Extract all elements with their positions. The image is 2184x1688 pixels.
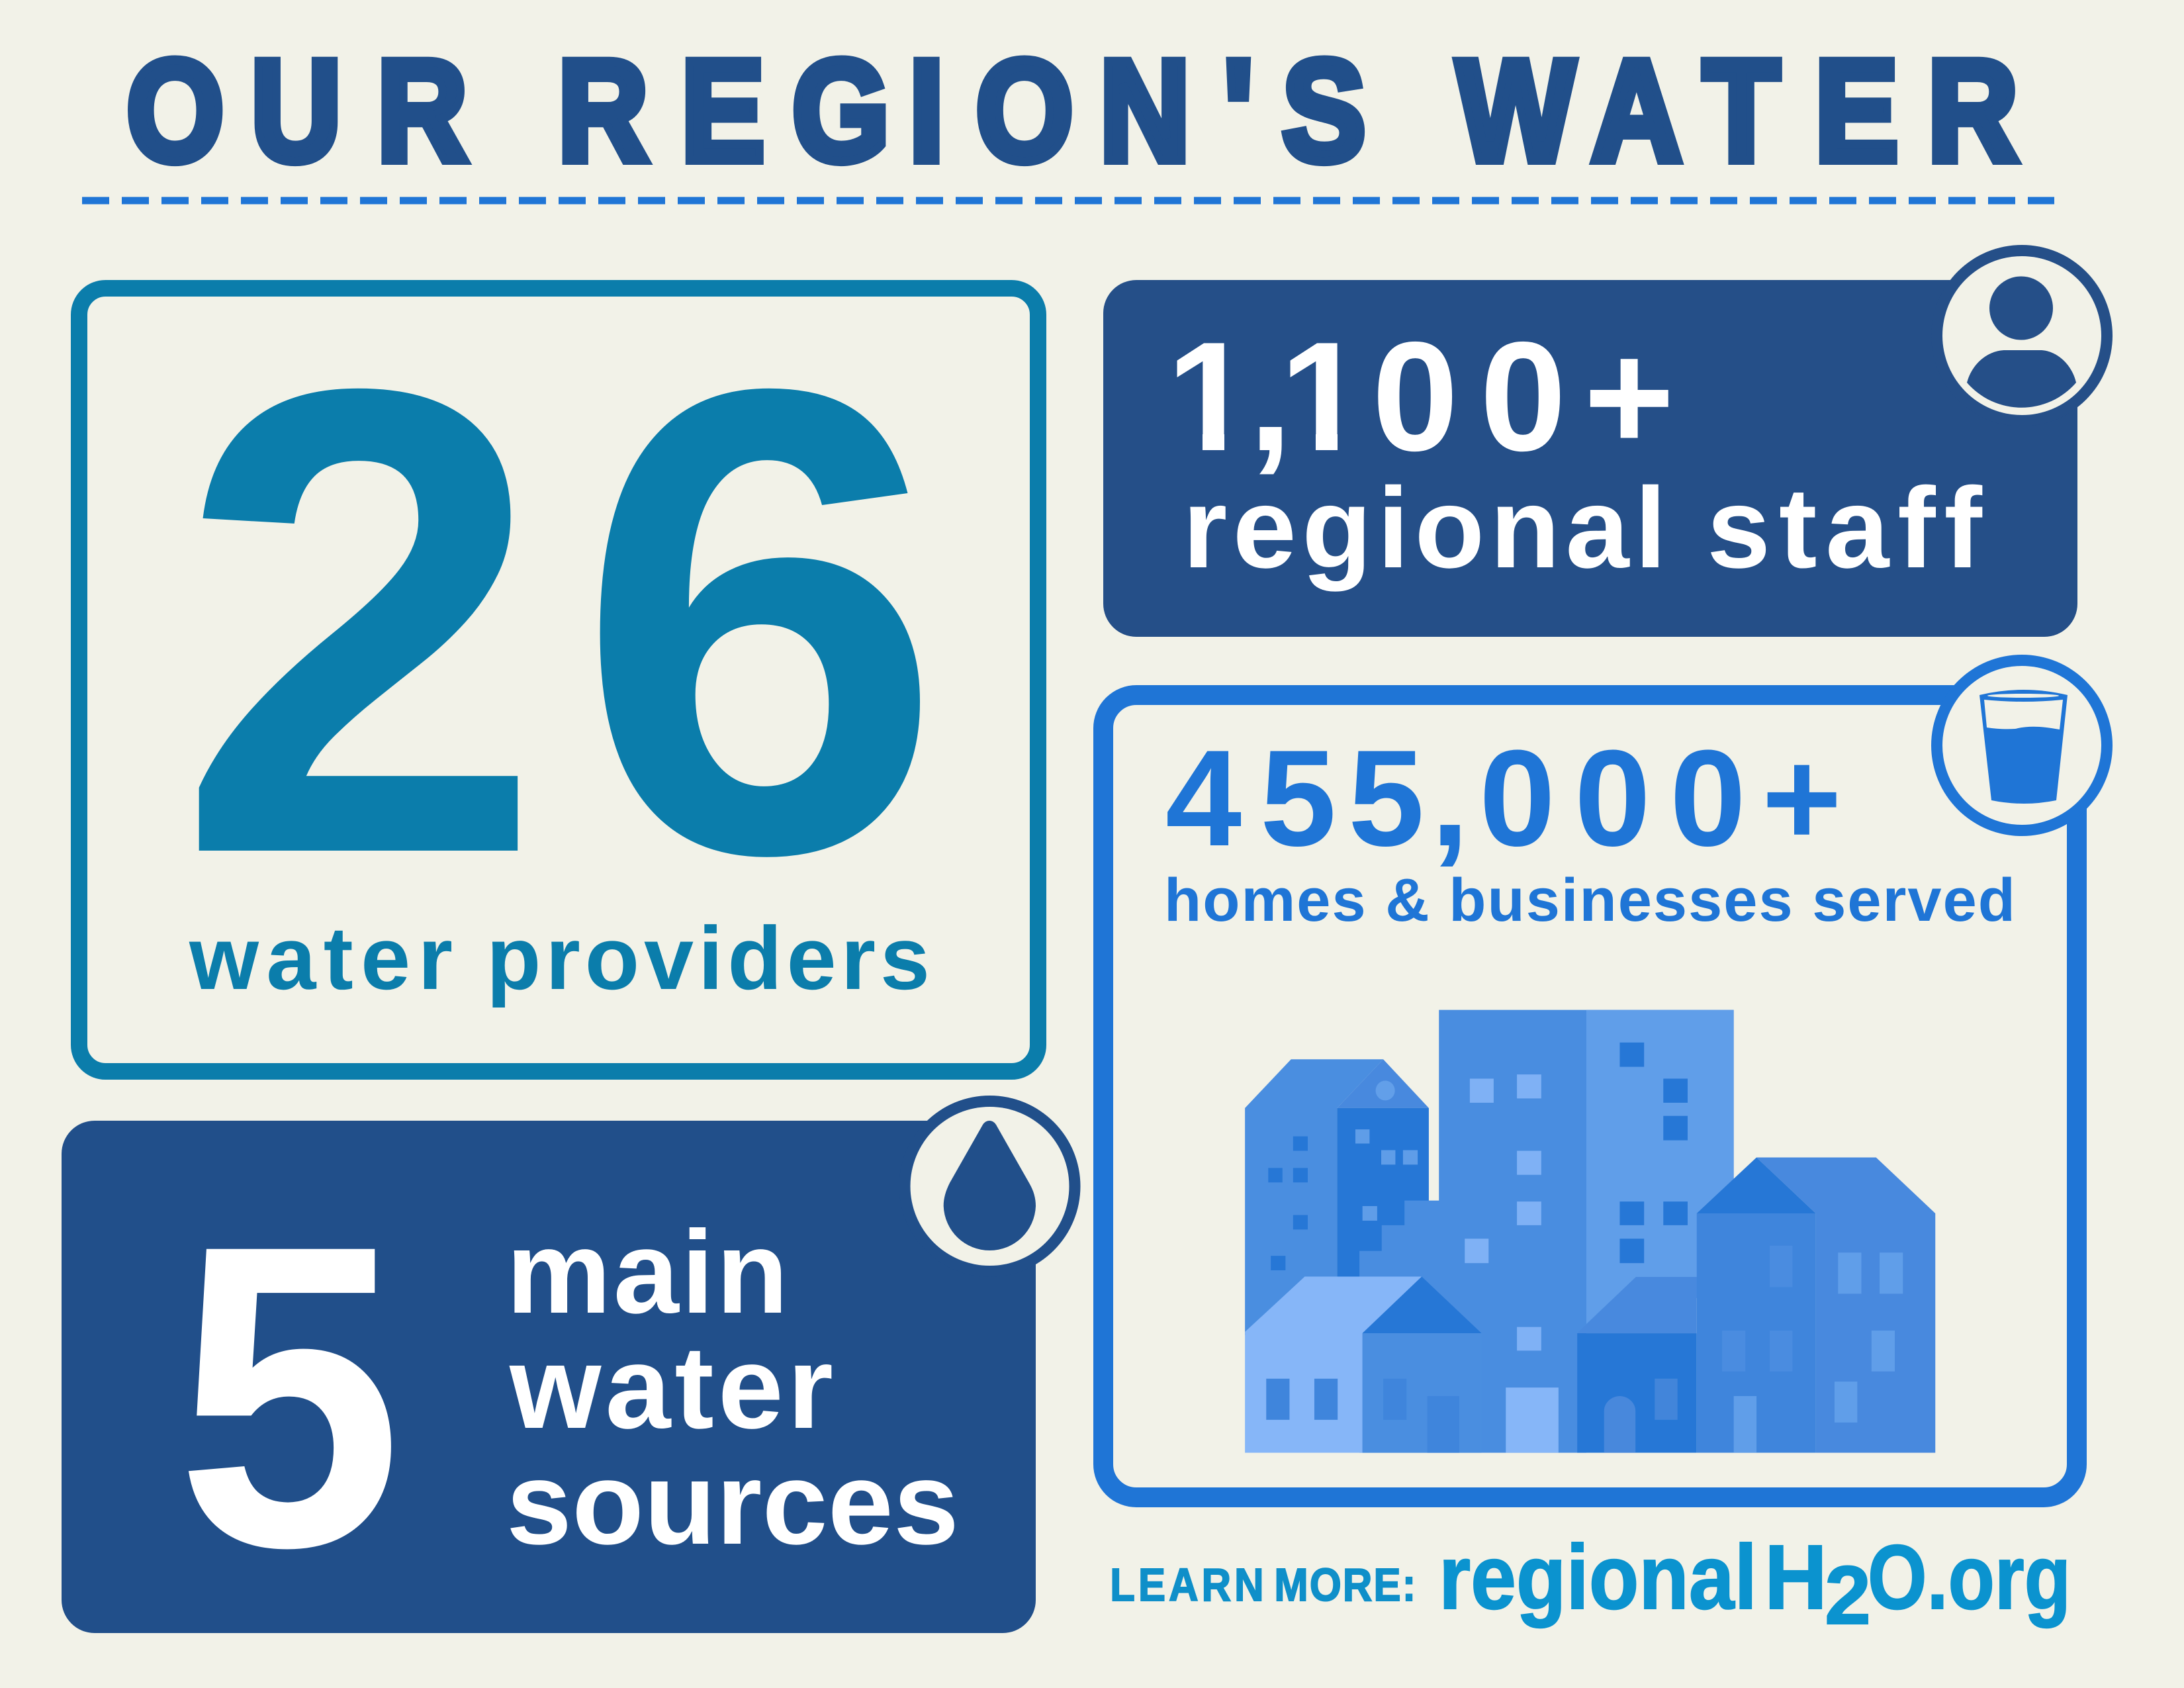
title: OUR REGION'S WATER xyxy=(126,31,2018,191)
small house left xyxy=(1245,1276,1482,1453)
number 455,000+: 455,000+ xyxy=(1165,722,1842,874)
website url: O.org xyxy=(1868,1526,2071,1628)
learn more label: MORE: xyxy=(1274,1558,1416,1611)
left tall building xyxy=(1245,1059,1429,1335)
label: main water sources: main xyxy=(506,1206,788,1338)
label: water providers: providers xyxy=(486,908,930,1008)
panel background xyxy=(1103,280,2077,637)
illustration: city buildings xyxy=(1245,1010,1935,1453)
number 26: 26 xyxy=(176,252,944,991)
icon: person xyxy=(1931,245,2113,426)
central tower xyxy=(1359,1010,1734,1453)
label: main water sources: sources xyxy=(506,1437,959,1569)
number 1,100+: 1,100+ xyxy=(1166,309,1674,483)
website url: H xyxy=(1764,1526,1827,1628)
panel border xyxy=(1103,695,2077,1497)
number 5: 5 xyxy=(176,1156,402,1636)
website url: regional xyxy=(1439,1526,1757,1628)
learn more label: LEARN xyxy=(1110,1558,1264,1611)
dark house middle xyxy=(1577,1333,1697,1453)
panel: homes and businesses served xyxy=(1103,655,2113,1497)
panel background xyxy=(62,1121,1036,1633)
panel: water sources xyxy=(62,1096,1080,1636)
panel: water providers xyxy=(79,252,1038,1071)
house right xyxy=(1697,1157,1935,1453)
panel border xyxy=(79,289,1038,1071)
label: regional staff: regional xyxy=(1183,463,1666,592)
panel: regional staff xyxy=(1103,245,2113,637)
icon: water glass xyxy=(1931,655,2113,836)
label: water providers: water xyxy=(189,908,453,1008)
label: main water sources: water xyxy=(509,1321,833,1453)
label: homes and businesses served: homes & businesses served xyxy=(1164,867,2015,934)
icon: water drop xyxy=(899,1096,1080,1277)
label: regional staff: staff xyxy=(1707,463,1982,592)
website url: 2 xyxy=(1825,1550,1871,1642)
